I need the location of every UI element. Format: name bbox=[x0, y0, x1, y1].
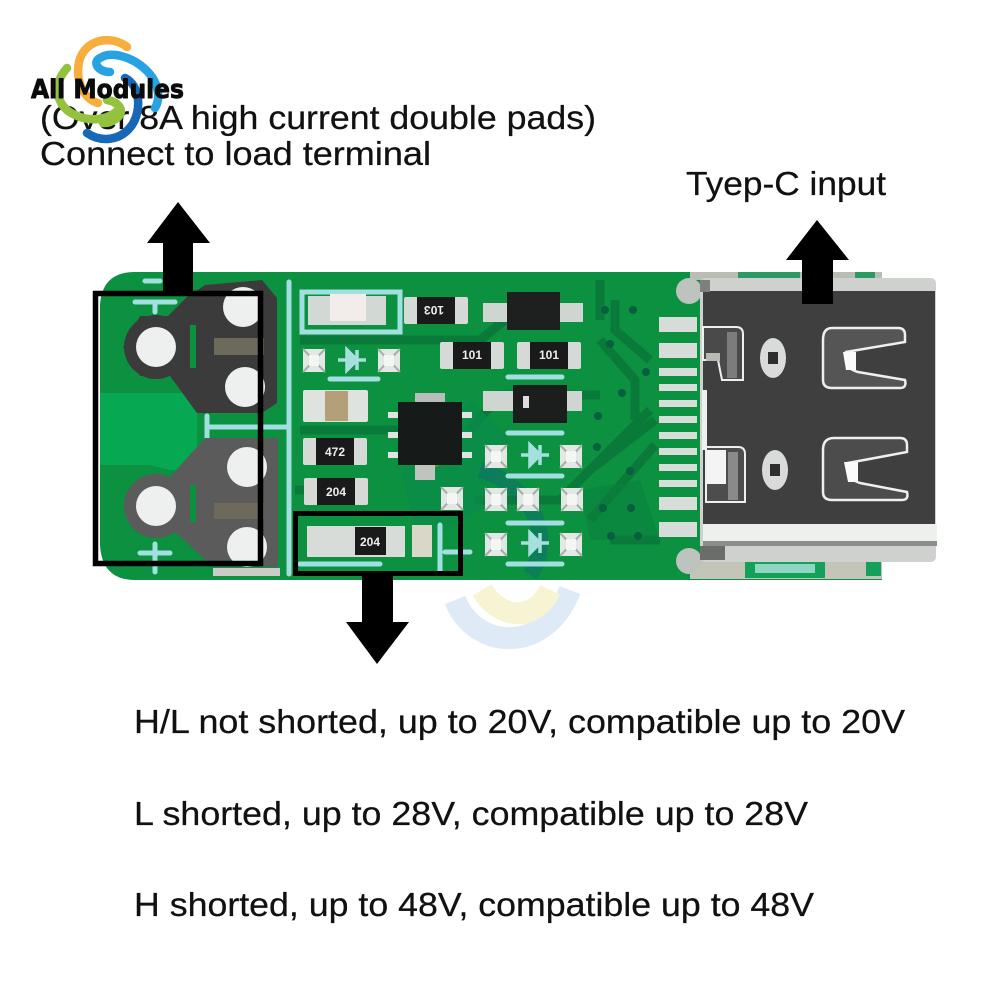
resistor 204: 204 bbox=[326, 485, 346, 499]
resistor 103: 103 bbox=[424, 303, 444, 317]
top plate bbox=[123, 280, 277, 413]
resistors 101: 101 bbox=[462, 348, 482, 362]
arrow: to load terminal bbox=[147, 202, 210, 291]
board traces bbox=[295, 280, 660, 540]
low resistor 204 bbox=[307, 525, 432, 557]
bottom plate bbox=[123, 438, 278, 567]
board watermark arcs bbox=[424, 405, 540, 575]
label: Type-C input: Tyep-C input bbox=[686, 165, 886, 202]
connector shell bbox=[700, 278, 936, 562]
low resistor 204: 204 bbox=[360, 535, 380, 549]
arrow: Type-C input bbox=[786, 220, 849, 304]
voltage notes: L shorted, up to 28V, compatible up to 28V bbox=[134, 795, 808, 832]
pad groups bbox=[485, 445, 507, 468]
pad holes bbox=[136, 287, 267, 567]
voltage notes bbox=[134, 703, 905, 923]
solder plates: high current double pads bbox=[123, 280, 280, 576]
resistor 204 bbox=[304, 478, 368, 505]
resistor 472: 472 bbox=[325, 445, 345, 459]
resistor 103 bbox=[404, 297, 468, 324]
vias bbox=[593, 306, 650, 540]
arrow: down to voltage notes bbox=[346, 576, 409, 664]
heading: load terminal note: Connect to load terminal bbox=[40, 135, 431, 172]
left upper cutout bbox=[703, 327, 743, 380]
heading: load terminal note bbox=[40, 99, 596, 172]
frame: load pads bbox=[96, 294, 260, 564]
transistor 2 bbox=[483, 385, 582, 423]
frame: shorting resistor bbox=[296, 514, 460, 574]
capacitor bbox=[303, 390, 368, 422]
voltage notes: H shorted, up to 48V, compatible up to 48V bbox=[134, 886, 814, 923]
PCB board bbox=[100, 272, 882, 580]
heading: load terminal note: (Over 8A high current double pads) bbox=[40, 99, 596, 136]
voltage notes: H/L not shorted, up to 20V, compatible up to 20V bbox=[134, 703, 905, 740]
logo: All Modules bbox=[31, 40, 184, 139]
SMD components bbox=[303, 292, 583, 557]
SMD components: 101 bbox=[539, 348, 559, 362]
contact ovals bbox=[760, 338, 786, 378]
left lower cutout bbox=[706, 447, 745, 502]
resistor 472 bbox=[303, 438, 367, 465]
logo: All Modules: All Modules bbox=[31, 75, 184, 105]
Type-C connector bbox=[676, 278, 937, 574]
board edge strips under connector bbox=[690, 272, 882, 579]
right lower contact bbox=[823, 438, 907, 500]
connector solder fingers bbox=[659, 317, 697, 537]
LED bbox=[308, 296, 386, 325]
resistors 101 bbox=[440, 342, 504, 369]
silkscreen lines bbox=[135, 281, 562, 574]
diode pads bbox=[303, 349, 325, 372]
watermark: faint logo arcs below board bbox=[455, 590, 570, 638]
right upper contact bbox=[823, 328, 905, 388]
transistor W8 bbox=[483, 292, 583, 330]
main chip bbox=[388, 393, 472, 480]
